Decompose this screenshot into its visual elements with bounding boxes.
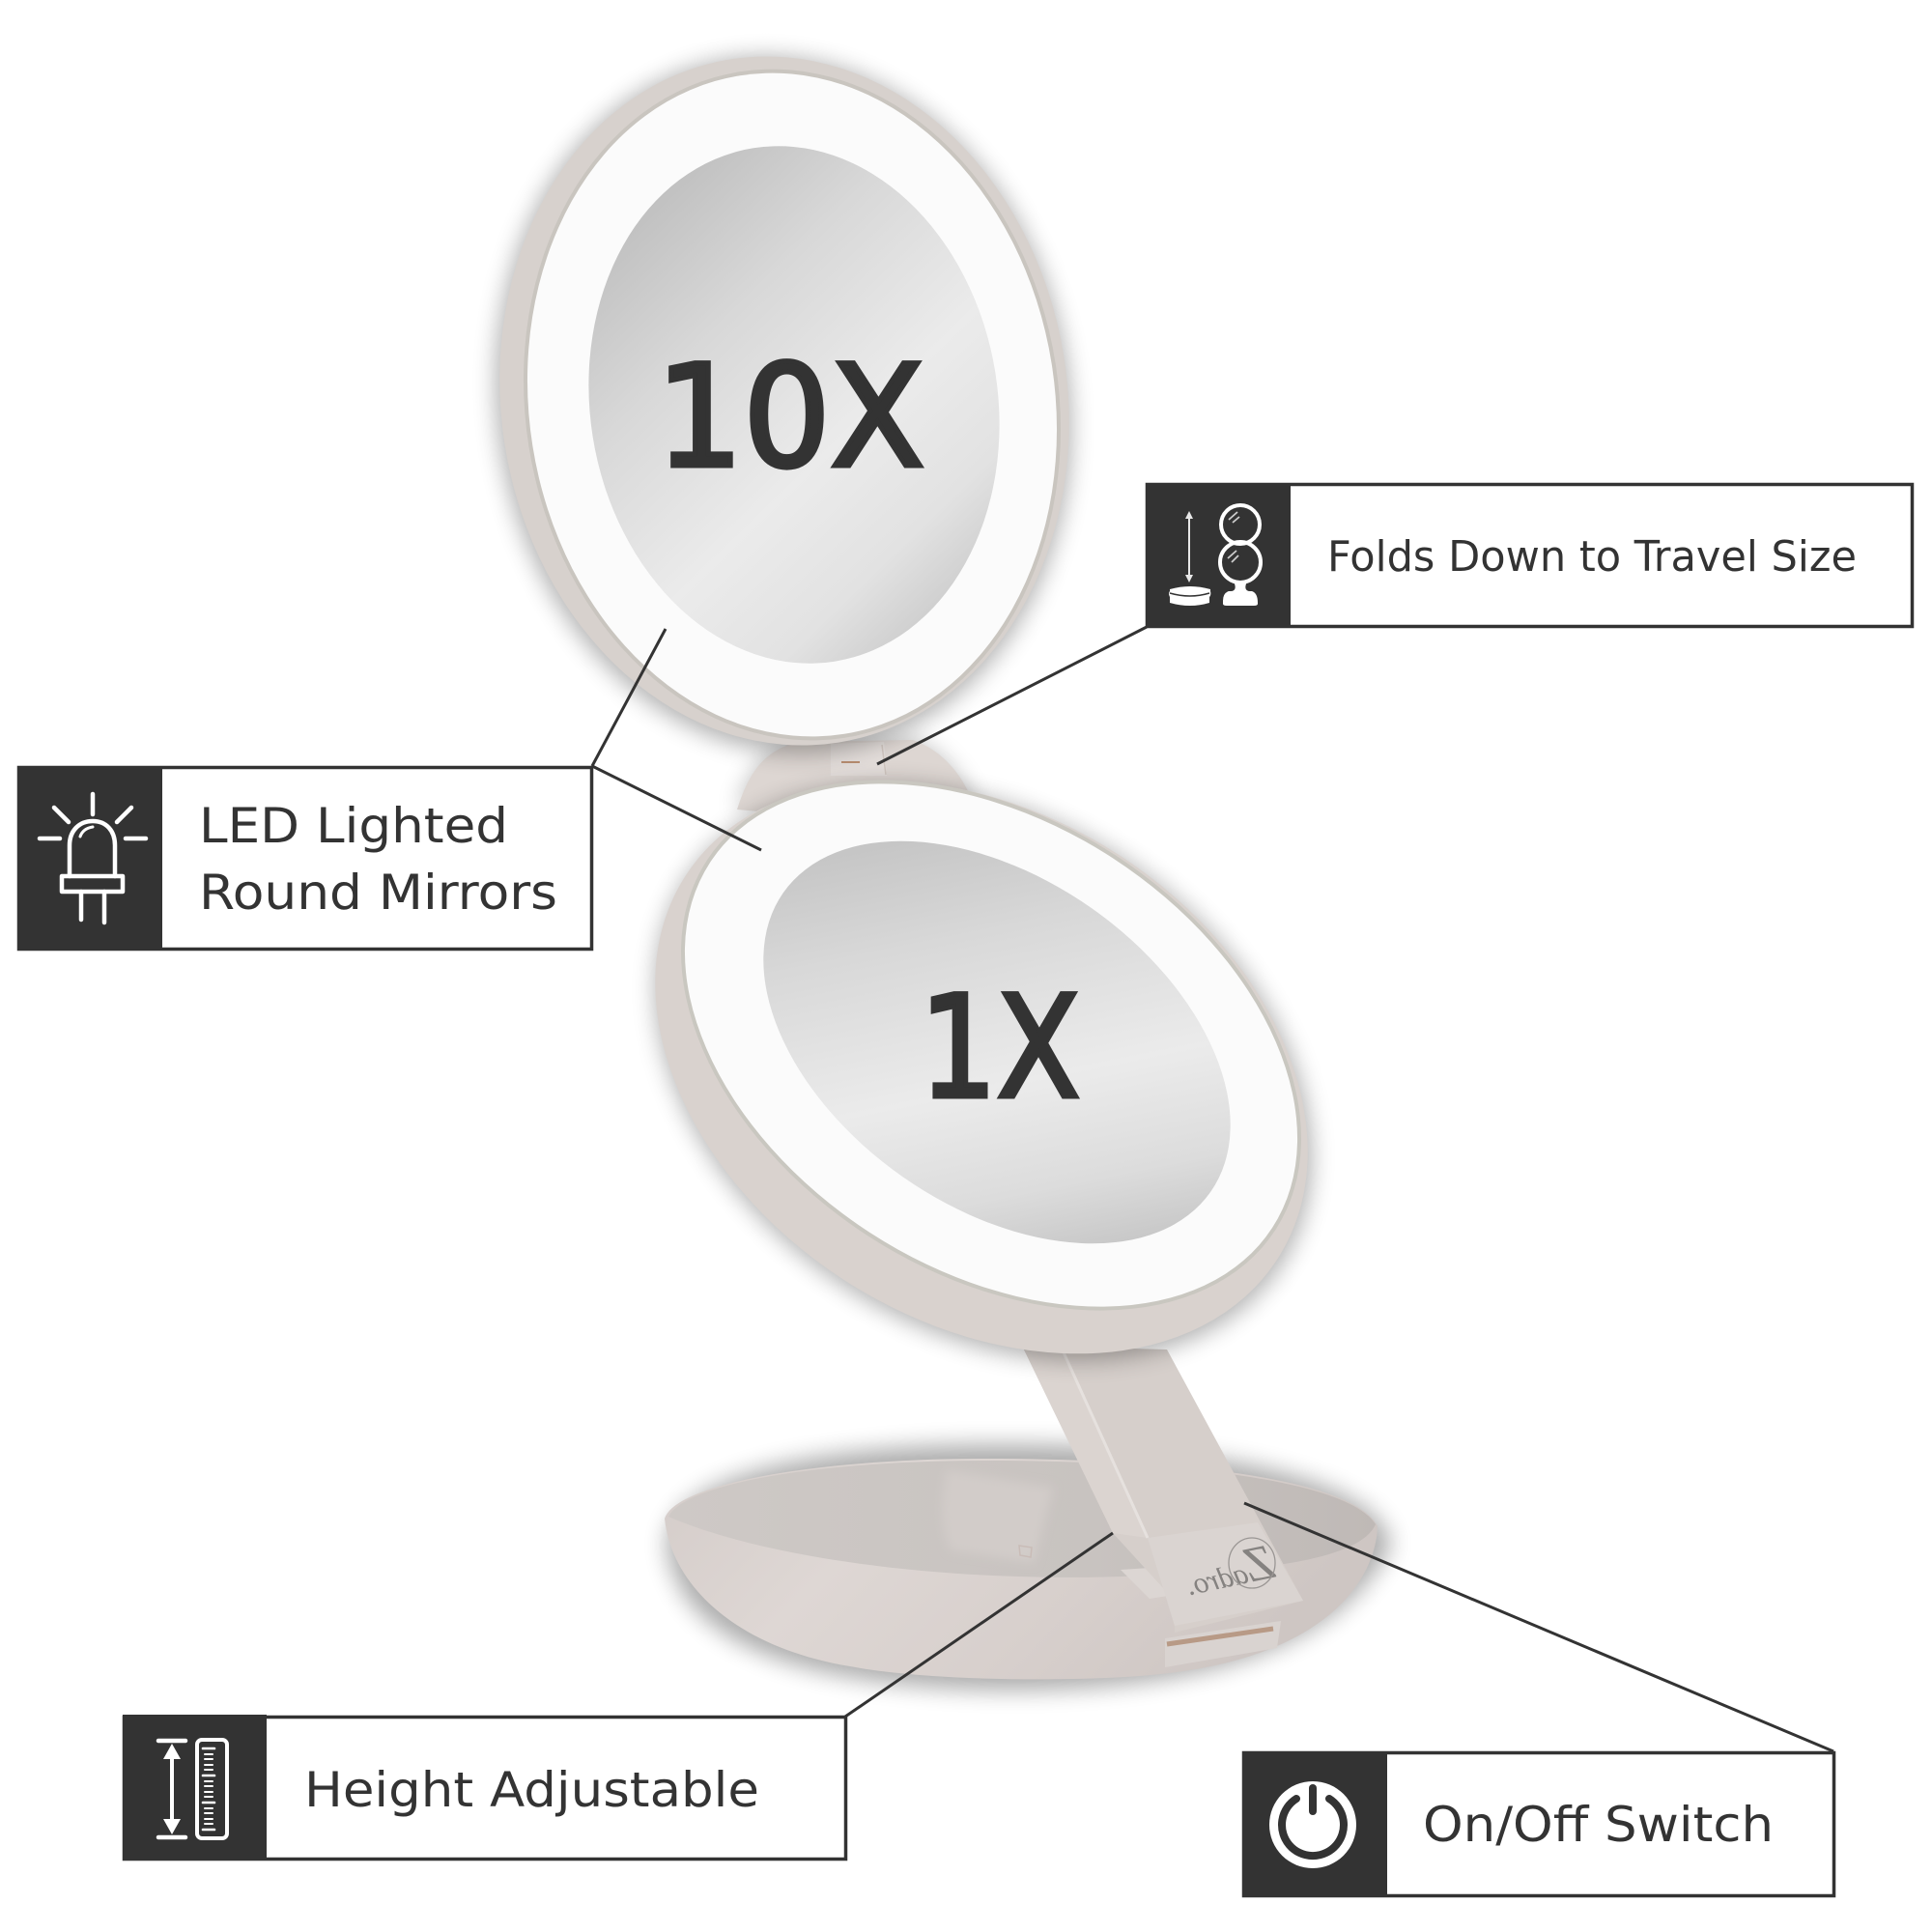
product: double-sided folding mirror — [446, 14, 1420, 1690]
text: LED Lighted Round Mirrors: Round Mirrors — [199, 865, 557, 921]
icon: power switch — [1269, 1781, 1356, 1868]
icon: height ruler — [158, 1740, 227, 1838]
text: Height Adjustable: Height Adjustable — [304, 1762, 759, 1818]
mirror face — [553, 116, 1036, 694]
label: 10X: 10X — [656, 335, 924, 499]
upper mirror: 10X side — [446, 14, 1121, 795]
hinge between mirrors — [737, 740, 976, 821]
text: Folds Down to Travel Size: Folds Down to Travel Size — [1327, 532, 1857, 582]
callout: Height Adjustable — [123, 1715, 846, 1861]
text: On/Off Switch: On/Off Switch — [1423, 1797, 1774, 1853]
base of the mirror — [665, 1444, 1391, 1690]
light ring — [480, 35, 1104, 775]
icon: LED bulb — [40, 794, 146, 923]
mirror face — [689, 758, 1305, 1326]
icon: folding mirrors — [1169, 505, 1261, 606]
callout: On/Off Switch — [1242, 1751, 1833, 1897]
label: 1X: 1X — [920, 966, 1080, 1130]
light ring — [588, 675, 1394, 1415]
callout: Folds Down to Travel Size — [1146, 483, 1913, 628]
mirror support arm — [1022, 1346, 1303, 1667]
text: LED Lighted Round Mirrors: LED Lighted — [199, 798, 508, 854]
text: LED Lighted Round Mirrors — [199, 798, 557, 921]
callout: LED Lighted Round Mirrors — [17, 766, 591, 951]
logo: mirrored Zadro wordmark: Zadro. — [1179, 1534, 1279, 1606]
lower mirror: 1X side — [547, 663, 1420, 1479]
leader lines — [592, 627, 1833, 1751]
